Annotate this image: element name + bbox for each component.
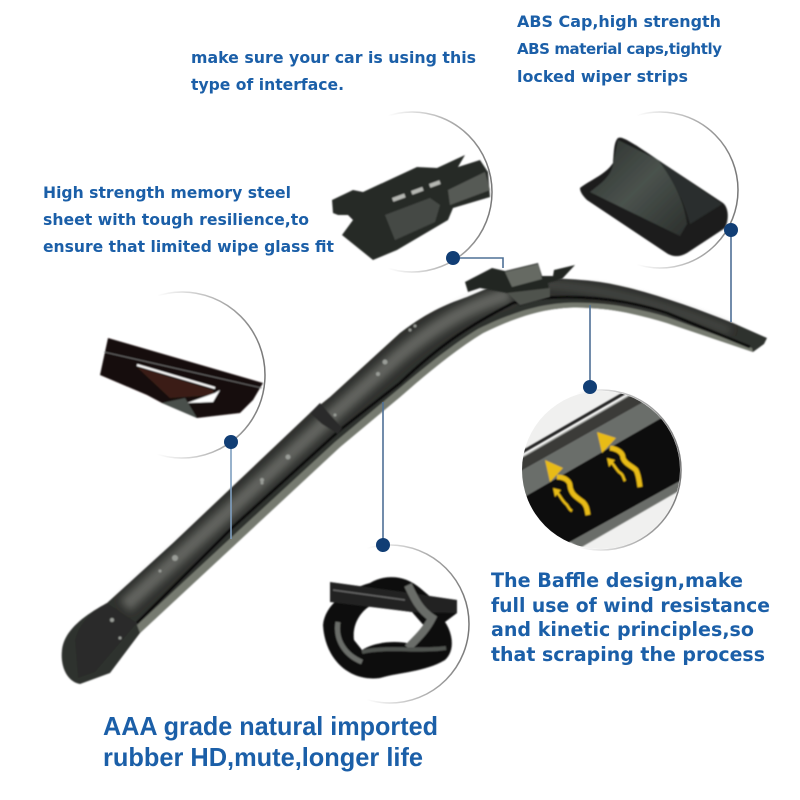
wiper blade xyxy=(62,278,767,684)
text: ABS cap: ABS material caps,tightly xyxy=(517,40,722,58)
text: memory steel: ensure that limited wipe glass fit xyxy=(43,237,334,256)
text: rubber: AAA grade natural imported xyxy=(103,711,438,741)
circle: ABS cap detail xyxy=(580,112,738,268)
text: baffle xyxy=(491,569,770,666)
circle: steel sheet detail xyxy=(99,292,265,458)
ABS cap photo xyxy=(580,138,728,256)
text: memory steel: High strength memory steel xyxy=(43,183,291,202)
text: baffle: The Baffle design,make xyxy=(491,569,743,592)
steel sheet photo xyxy=(100,338,263,418)
circle: adapter detail xyxy=(332,112,492,272)
text: memory steel: sheet with tough resilience,to xyxy=(43,210,309,229)
text: rubber xyxy=(103,711,438,772)
text: rubber: rubber HD,mute,longer life xyxy=(103,742,423,772)
yellow arrows xyxy=(555,448,640,515)
text: interface: make sure your car is using this xyxy=(191,48,476,67)
baffle photo xyxy=(522,393,680,547)
text: interface: type of interface. xyxy=(191,75,344,94)
rubber strip knot xyxy=(323,577,457,678)
text: interface xyxy=(191,48,476,94)
wiper adapter xyxy=(465,263,575,306)
text: ABS cap xyxy=(517,12,722,86)
text: baffle: that scraping the process xyxy=(491,643,765,666)
text: baffle: and kinetic principles,so xyxy=(491,618,754,641)
adapter photo xyxy=(332,155,490,260)
text: baffle: full use of wind resistance xyxy=(491,594,770,617)
text: memory steel xyxy=(43,183,334,256)
circle: rubber detail xyxy=(311,545,469,703)
text: ABS cap: ABS Cap,high strength xyxy=(517,12,721,31)
connector dots xyxy=(224,223,738,552)
connector lines xyxy=(231,230,731,545)
circle: baffle detail xyxy=(522,389,682,551)
text: ABS cap: locked wiper strips xyxy=(517,67,688,86)
